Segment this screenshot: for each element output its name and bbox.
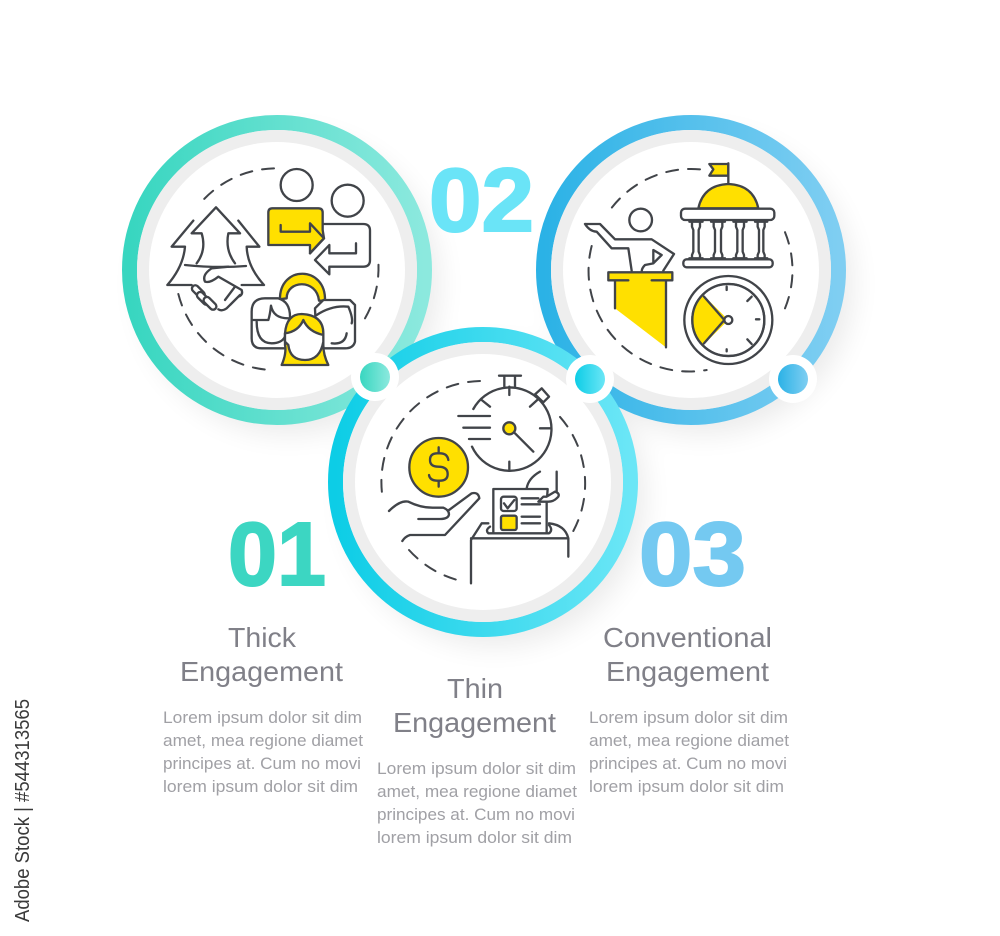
icon: speaker, capitol and clock xyxy=(585,163,792,372)
number 01: 01 xyxy=(228,505,326,605)
text block: thin engagement: lorem ipsum dolor sit dim xyxy=(377,828,572,847)
text block: conventional engagement: principes at. Cum no movi xyxy=(589,754,787,773)
text block: thick engagement: Lorem ipsum dolor sit dim xyxy=(163,708,362,727)
text block: thin engagement xyxy=(377,759,577,847)
heading: thick engagement: Thick xyxy=(228,622,297,653)
text block: thick engagement: principes at. Cum no movi xyxy=(163,754,361,773)
text block: thin engagement: amet, mea regione diamet xyxy=(377,782,577,801)
text block: thin engagement: Lorem ipsum dolor sit dim xyxy=(377,759,576,778)
heading: conventional engagement: Engagement xyxy=(606,656,769,687)
text block: thick engagement: amet, mea regione diamet xyxy=(163,731,363,750)
heading: thin engagement xyxy=(393,673,556,738)
text block: conventional engagement: Lorem ipsum dolor sit dim xyxy=(589,708,788,727)
circle shadows xyxy=(139,134,853,646)
heading: thick engagement: Engagement xyxy=(180,656,343,687)
side credit text: Adobe Stock | #544313565 xyxy=(12,699,34,922)
text block: conventional engagement xyxy=(589,708,789,796)
connector node: conventional xyxy=(769,355,817,403)
text block: thick engagement: lorem ipsum dolor sit dim xyxy=(163,777,358,796)
panel: conventional engagement ring xyxy=(544,122,838,418)
heading: conventional engagement: Conventional xyxy=(603,622,772,653)
number 03: 03 xyxy=(639,505,746,605)
icon: stopwatch, coin in hand and ballot box xyxy=(381,376,585,583)
icon: collaboration group, trees and handshake xyxy=(167,168,379,370)
connector node: thin xyxy=(566,355,614,403)
text block: conventional engagement: lorem ipsum dolor sit dim xyxy=(589,777,784,796)
heading: thick engagement xyxy=(180,622,343,687)
text block: conventional engagement: amet, mea regione diamet xyxy=(589,731,789,750)
connector node: thick xyxy=(351,353,399,401)
number 02: 02 xyxy=(429,151,534,251)
handshake fingers xyxy=(191,284,218,311)
heading: thin engagement: Engagement xyxy=(393,707,556,738)
text block: thin engagement: principes at. Cum no movi xyxy=(377,805,575,824)
heading: thin engagement: Thin xyxy=(447,673,503,704)
text block: thick engagement xyxy=(163,708,363,796)
panel: thin engagement ring xyxy=(336,334,630,630)
panel: thick engagement ring xyxy=(130,122,424,418)
heading: conventional engagement xyxy=(603,622,772,687)
